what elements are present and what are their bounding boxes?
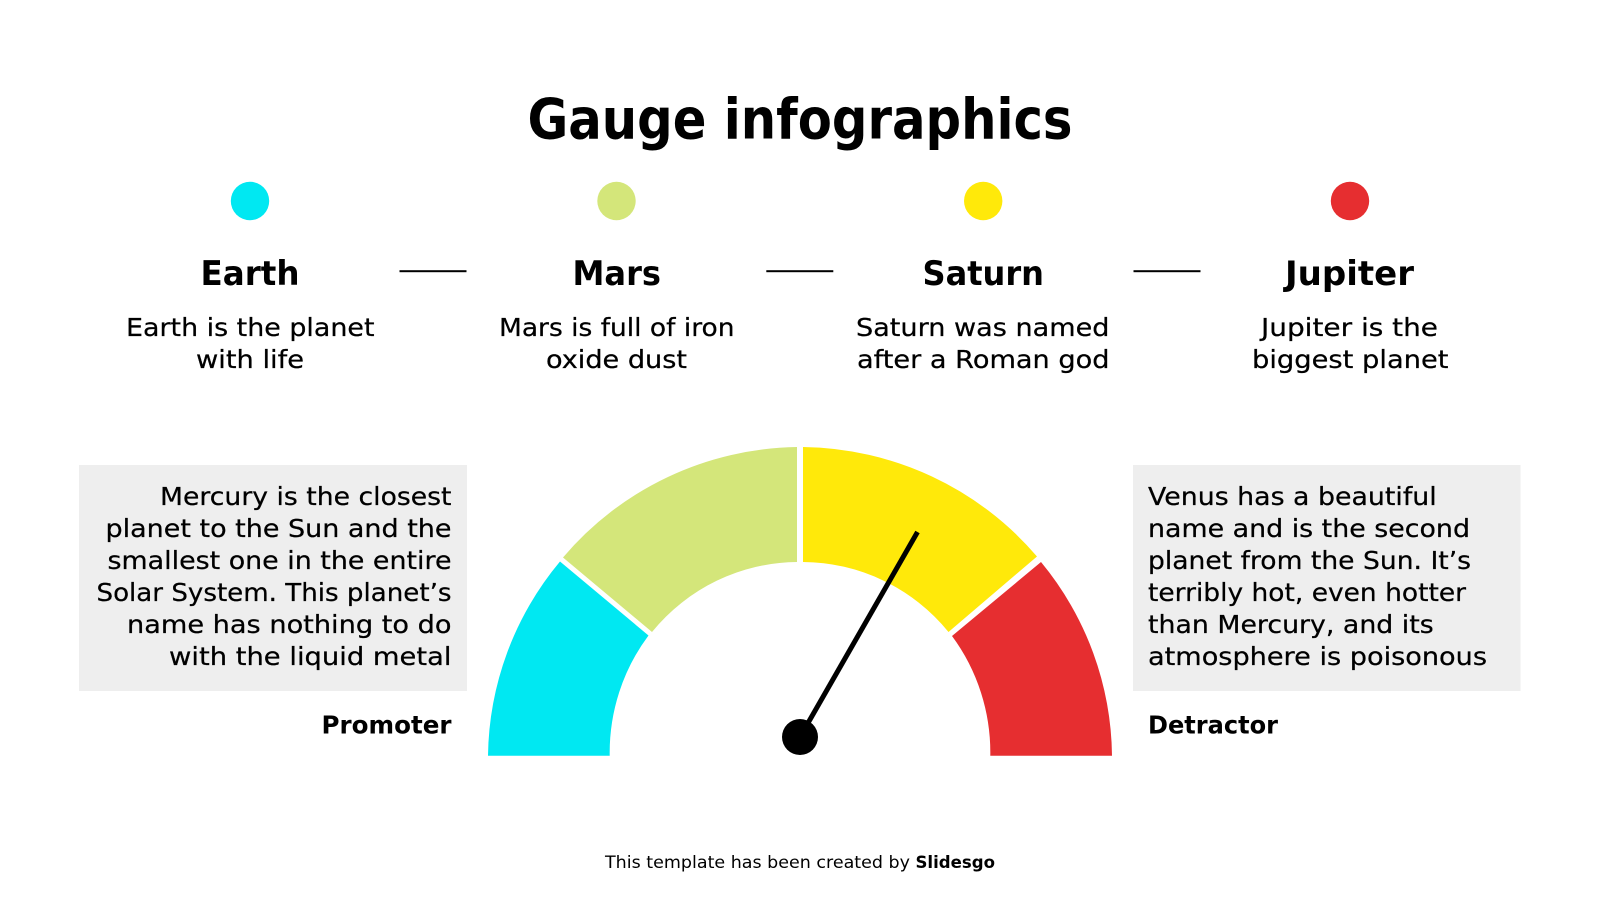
text: Mars description: Mars is full of iron	[499, 313, 734, 342]
panel: Mars	[499, 182, 734, 374]
text: Saturn description	[856, 313, 1110, 374]
panel: Promoter description box: smallest one in the entire	[108, 546, 452, 575]
connector: Saturn to Jupiter	[1134, 270, 1200, 272]
panel: Promoter description box: Mercury is the closest	[160, 482, 452, 511]
text: Saturn description: after a Roman god	[857, 345, 1110, 374]
footer credit: This template has been created by	[604, 853, 910, 873]
icon: Saturn yellow dot	[964, 182, 1002, 220]
text: Mars description: oxide dust	[546, 345, 687, 374]
panel: Detractor description box: Venus has a beautiful	[1148, 482, 1437, 511]
panel: Detractor description box: planet from the Sun. It’s	[1148, 546, 1471, 575]
text: Jupiter description	[1252, 313, 1449, 374]
panel: Promoter description box	[79, 465, 467, 691]
panel: Promoter description box: with the liquid metal	[169, 642, 452, 671]
icon: Mars green dot	[597, 182, 636, 220]
label: Detractor: Detractor	[1148, 710, 1279, 740]
heading: Jupiter: Jupiter	[1283, 254, 1414, 294]
panel: Promoter description box: Solar System. This planet’s	[96, 578, 452, 607]
chart: gauge	[488, 447, 1112, 756]
gauge needle	[782, 532, 918, 755]
text: Jupiter description: Jupiter is the	[1259, 313, 1438, 342]
connector: Mars to Saturn	[766, 270, 833, 272]
panel: Earth	[126, 182, 375, 374]
panel: Detractor description box: terribly hot, even hotter	[1148, 578, 1467, 607]
gauge segment: yellow	[803, 447, 1037, 632]
footer credit: Slidesgo	[916, 853, 995, 873]
panel: Saturn	[856, 182, 1110, 374]
gauge segment: green	[563, 447, 797, 632]
panel: Detractor description box	[1133, 465, 1520, 691]
text: Earth description: Earth is the planet	[126, 313, 375, 342]
panel: Jupiter	[1252, 182, 1449, 374]
text: Mars description	[499, 313, 734, 374]
panel: Promoter description box: name has nothing to do	[127, 610, 452, 639]
panel: Promoter description box: planet to the Sun and the	[106, 514, 452, 543]
panel: Detractor description box: name and is the second	[1148, 514, 1470, 543]
label: Promoter: Promoter	[322, 710, 452, 740]
icon: Jupiter red dot	[1331, 182, 1369, 220]
text: Earth description	[126, 313, 375, 374]
text: Earth description: with life	[196, 345, 304, 374]
heading: Mars: Mars	[572, 254, 661, 294]
panel: Detractor description box: than Mercury, and its	[1148, 610, 1434, 639]
text: Saturn description: Saturn was named	[856, 313, 1110, 342]
gauge segment: red	[952, 562, 1112, 756]
text: Jupiter description: biggest planet	[1252, 345, 1449, 374]
icon: Earth cyan dot	[231, 182, 269, 220]
connector: Earth to Mars	[400, 270, 466, 272]
gauge segment: cyan	[488, 562, 648, 756]
heading: Saturn: Saturn	[922, 254, 1044, 294]
title: Gauge infographics	[528, 88, 1072, 152]
panel: Detractor description box: atmosphere is poisonous	[1148, 642, 1487, 671]
heading: Earth: Earth	[200, 254, 300, 294]
